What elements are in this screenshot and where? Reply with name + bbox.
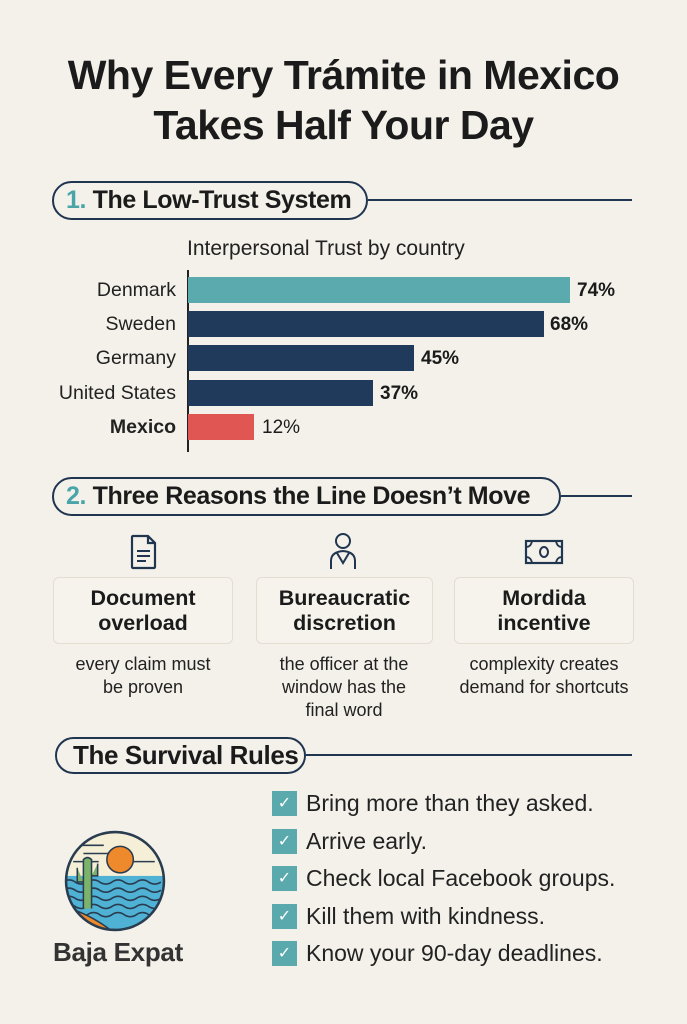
reason 1 <box>53 577 233 697</box>
title: Why Every Trámite in Mexico <box>68 52 619 98</box>
bar: Germany <box>96 345 459 371</box>
chart: interpersonal trust <box>59 237 615 452</box>
bar: United States <box>59 380 418 406</box>
section 2 heading <box>52 477 561 516</box>
bar: United States: United States <box>59 382 176 404</box>
bar: Mexico <box>110 414 300 440</box>
icon: document <box>130 534 156 570</box>
rule 4: Kill them with kindness. <box>306 903 545 929</box>
rule 2: ✓ <box>278 833 291 850</box>
section 1 heading: 1. <box>66 186 86 214</box>
title: Takes Half Your Day <box>153 102 534 148</box>
section 3 heading: The Survival Rules <box>73 740 298 770</box>
reason 1: every claim must <box>75 654 211 674</box>
reason 1: be proven <box>103 677 183 697</box>
section 1 heading: The Low-Trust System <box>93 186 351 214</box>
bar: Sweden: 68% <box>550 314 588 335</box>
bar: Germany: 45% <box>421 348 459 369</box>
rule 1: Bring more than they asked. <box>306 790 594 816</box>
chart title: Interpersonal Trust by country <box>187 237 465 260</box>
rule 3: Check local Facebook groups. <box>306 865 615 891</box>
reason 3: Mordida <box>502 586 586 610</box>
reason 2 <box>256 577 433 720</box>
bar: United States: 37% <box>380 383 418 404</box>
bar: Denmark: Denmark <box>97 279 176 301</box>
bar: Germany: Germany <box>96 347 176 369</box>
rule 2: Arrive early. <box>306 828 427 854</box>
bar: Sweden: Sweden <box>106 313 176 335</box>
title <box>68 52 619 148</box>
section 2 heading: Three Reasons the Line Doesn’t Move <box>93 482 530 510</box>
logo: Baja Expat: Baja Expat <box>53 937 183 967</box>
rule 5: ✓ <box>278 945 291 962</box>
reason 2: final word <box>305 700 383 720</box>
reason 2: the officer at the <box>280 654 408 674</box>
bar: Mexico: 12% <box>262 417 300 438</box>
icon: person <box>330 533 356 569</box>
reason 2: window has the <box>282 677 406 697</box>
reason 1: overload <box>98 611 188 635</box>
rule 1: ✓ <box>278 795 291 812</box>
rule 4: ✓ <box>278 908 291 925</box>
bar: Denmark: 74% <box>577 280 615 301</box>
rule 5: Know your 90-day deadlines. <box>306 940 603 966</box>
reason 2: Bureaucratic <box>279 586 410 610</box>
reason 1: Document <box>90 586 196 610</box>
bar: Denmark <box>97 277 615 303</box>
reason 2: discretion <box>293 611 396 635</box>
reason 3 <box>454 577 634 697</box>
reason 3: complexity creates <box>469 654 619 674</box>
rule 3: ✓ <box>278 870 291 887</box>
checklist: survival rules <box>272 790 615 966</box>
icon: money <box>524 540 564 564</box>
section 1 heading <box>52 181 368 220</box>
section 2 heading: 2. <box>66 482 86 510</box>
reason 3: demand for shortcuts <box>459 677 629 697</box>
bar: Sweden <box>106 311 588 337</box>
reason 3: incentive <box>497 611 591 635</box>
logo: Baja Expat <box>53 830 183 967</box>
bar: Mexico: Mexico <box>110 416 176 438</box>
